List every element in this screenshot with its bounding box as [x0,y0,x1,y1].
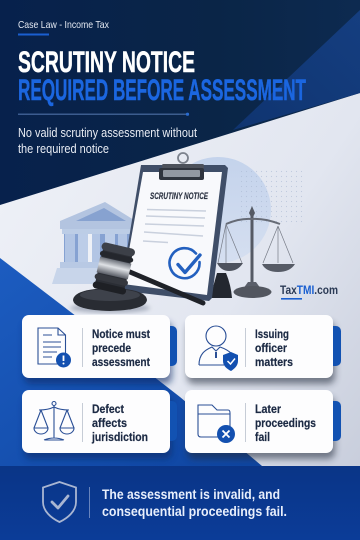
subtitle: No valid scrutiny assessment without [18,126,197,140]
icon: gavel [70,242,203,313]
card text: assessment [92,355,150,369]
blue diagonal lower panel [0,258,262,466]
paper [123,172,222,295]
conclusion text: consequential proceedings fail. [102,504,287,519]
icon: courthouse [52,202,134,284]
clipboard with notice [121,153,228,301]
icon: folder with cross [198,405,235,443]
card text [255,327,293,369]
card text: Notice must [92,327,150,341]
card: issuing officer matters [185,315,341,384]
hero illustration [52,153,338,313]
card text: precede [92,341,131,355]
title rule with dot [18,113,189,116]
card: later proceedings fail [185,390,341,459]
clipboard board [121,165,228,301]
eyebrow: case law category: Case Law - Income Tax [18,19,110,31]
card: notice must precede assessment [22,315,177,384]
conclusion text: The assessment is invalid, and [102,487,280,502]
card text: fail [255,430,270,444]
card text: proceedings [255,416,316,430]
card text: Issuing [255,327,289,341]
logo: TaxTMI.com: TaxTMI.com [280,283,338,297]
card text: affects [92,416,127,430]
clipboard clip [159,153,204,180]
card text [91,402,148,444]
clipboard stand [210,273,232,298]
icon: shield check [43,482,76,522]
paper text lines [143,210,206,242]
card: defect affects jurisdiction [22,390,177,459]
icon: scales [34,402,74,440]
bottom conclusion band [0,466,360,540]
card text [92,327,150,369]
decorative circle behind clipboard [165,157,271,263]
card text: matters [255,355,293,369]
card text: Later [255,402,281,416]
conclusion text [102,487,287,519]
icon: officer with shield [199,326,238,371]
icon: scales of justice [217,206,295,298]
dark navy header shape [0,0,360,205]
eyebrow accent bar [18,34,49,36]
card text: Defect [92,402,124,416]
title line 1: SCRUTINY NOTICE [18,46,195,79]
paper heading: SCRUTINY NOTICE [150,191,208,202]
card text [255,402,316,444]
lighter blue header triangle [233,10,360,130]
icon: blue check badge [170,248,200,278]
subtitle: the required notice [18,142,109,156]
subtitle [18,126,197,156]
card text: officer [255,341,287,355]
header text block [18,19,306,156]
card text: jurisdiction [91,430,148,444]
icon: document with alert [38,328,71,368]
